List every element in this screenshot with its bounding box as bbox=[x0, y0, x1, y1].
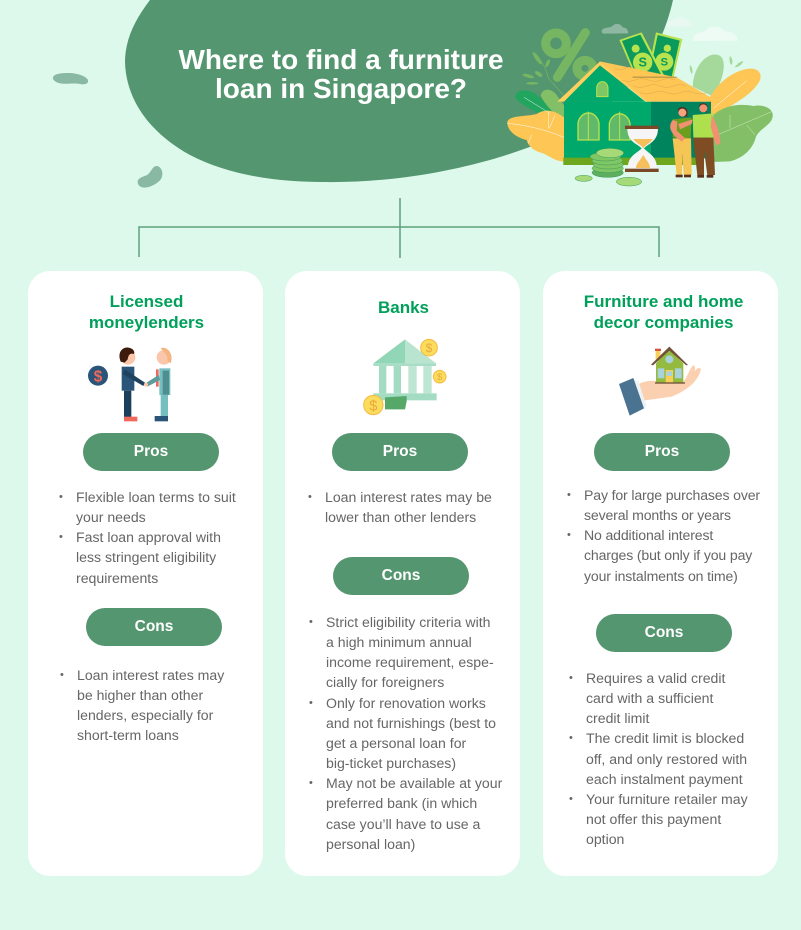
panel: furniture and home decor companies bbox=[543, 271, 778, 876]
card 3 pros list: several months or years bbox=[584, 507, 731, 523]
title bbox=[178, 44, 504, 104]
card 3 cons list: Your furniture retailer may bbox=[586, 791, 748, 807]
header blob bbox=[125, 0, 673, 182]
twig leaves bbox=[522, 51, 563, 95]
decorative blob left bbox=[53, 73, 88, 84]
card 3 cons button bbox=[596, 614, 732, 652]
card 3 cons list: each instalment payment bbox=[586, 771, 743, 787]
card 3 pros list: No additional interest bbox=[584, 527, 713, 543]
text: • bbox=[60, 669, 64, 681]
text: • bbox=[308, 491, 312, 503]
card 2 cons list: big-ticket purchases) bbox=[326, 755, 456, 771]
house bbox=[557, 61, 711, 165]
card 2 cons button: Cons bbox=[382, 567, 420, 584]
background leaves bbox=[507, 55, 773, 162]
card 2 pros list: Loan interest rates may be bbox=[325, 489, 492, 505]
couple bbox=[670, 103, 720, 178]
card 1 cons list: short-term loans bbox=[77, 727, 179, 743]
card 1 pros button: Pros bbox=[134, 443, 168, 460]
card 2 pros button: Pros bbox=[383, 443, 417, 460]
decorative blob lower bbox=[138, 166, 162, 188]
heading: licensed moneylenders: moneylenders bbox=[89, 313, 204, 332]
card 1 cons list: Loan interest rates may bbox=[77, 667, 224, 683]
card 1 cons button bbox=[86, 608, 222, 646]
percent sign bbox=[546, 33, 593, 77]
card 2 cons list: May not be available at your bbox=[326, 775, 502, 791]
icon: bank with coins bbox=[363, 338, 446, 416]
card 3 pros list: your instalments on time) bbox=[584, 568, 738, 584]
icon: bank with coins: $ bbox=[369, 398, 377, 414]
card 1 pros list: Flexible loan terms to suit bbox=[76, 489, 236, 505]
text: • bbox=[567, 489, 571, 501]
card 3 pros list: charges (but only if you pay bbox=[584, 547, 752, 563]
banknotes: S bbox=[661, 57, 669, 69]
icon: bank with coins: $ bbox=[437, 372, 443, 382]
card 1 pros list: less stringent eligibility bbox=[76, 549, 216, 565]
title: Where to find a furniture bbox=[178, 44, 504, 75]
card 3 pros button bbox=[594, 433, 730, 470]
illustration: house, money and couple bbox=[507, 18, 773, 186]
text: • bbox=[309, 697, 313, 709]
card 2 cons list: personal loan) bbox=[326, 836, 415, 852]
card 2 pros list: lower than other lenders bbox=[325, 509, 476, 525]
banknotes: S bbox=[638, 56, 647, 70]
card 1 cons button: Cons bbox=[135, 618, 173, 635]
text: • bbox=[569, 672, 573, 684]
card 2 cons list: get a personal loan for bbox=[326, 735, 466, 751]
coin stack bbox=[575, 148, 642, 186]
card 2 cons list: and not furnishings (best to bbox=[326, 715, 496, 731]
card 2 cons list: Strict eligibility criteria with bbox=[326, 614, 490, 630]
icon: handshake bbox=[88, 348, 172, 422]
card 2 cons list: income requirement, espe- bbox=[326, 654, 494, 670]
card 2 cons list bbox=[309, 614, 502, 852]
card 2 cons list: case you’ll have to use a bbox=[326, 816, 480, 832]
card 2 cons button bbox=[333, 557, 469, 594]
text: • bbox=[59, 531, 63, 543]
icon: handshake: $ bbox=[94, 368, 103, 385]
card 1 pros list: Fast loan approval with bbox=[76, 529, 221, 545]
clouds bbox=[602, 17, 738, 41]
card 2 pros list bbox=[308, 489, 492, 525]
icon: bank with coins: $ bbox=[426, 341, 433, 355]
text: • bbox=[309, 777, 313, 789]
heading: furniture and home decor companies: Furniture and home bbox=[584, 292, 743, 311]
icon: hand holding a house bbox=[619, 346, 701, 416]
card 2 cons list: preferred bank (in which bbox=[326, 795, 477, 811]
text: • bbox=[569, 793, 573, 805]
hourglass bbox=[625, 126, 659, 172]
text: • bbox=[569, 732, 573, 744]
heading: banks: Banks bbox=[378, 298, 429, 317]
heading: furniture and home decor companies bbox=[584, 292, 743, 332]
heading: furniture and home decor companies: decor companies bbox=[594, 313, 733, 332]
card 1 pros list bbox=[59, 489, 236, 586]
title: loan in Singapore? bbox=[215, 72, 467, 104]
card 3 pros list: Pay for large purchases over bbox=[584, 487, 760, 503]
card 2 cons list: cially for foreigners bbox=[326, 674, 444, 690]
card 1 cons list bbox=[60, 667, 224, 743]
card 1 pros list: requirements bbox=[76, 570, 158, 586]
card 3 cons list: not offer this payment bbox=[586, 811, 721, 827]
card 1 cons list: lenders, especially for bbox=[77, 707, 213, 723]
panel: licensed moneylenders bbox=[28, 271, 263, 876]
card 1 pros button bbox=[83, 433, 219, 470]
heading: licensed moneylenders bbox=[89, 292, 204, 332]
text: • bbox=[309, 616, 313, 628]
text: • bbox=[59, 491, 63, 503]
text: • bbox=[567, 529, 571, 541]
card 3 cons list bbox=[569, 670, 748, 847]
card 3 pros button: Pros bbox=[645, 443, 679, 460]
card 2 pros button bbox=[332, 433, 468, 470]
card 3 cons list: option bbox=[586, 831, 624, 847]
card 3 pros list bbox=[567, 487, 760, 584]
card 2 cons list: Only for renovation works bbox=[326, 695, 486, 711]
card 1 cons list: be higher than other bbox=[77, 687, 203, 703]
card 3 cons list: Requires a valid credit bbox=[586, 670, 725, 686]
card 3 cons list: off, and only restored with bbox=[586, 751, 747, 767]
connector lines bbox=[139, 198, 659, 258]
card 1 pros list: your needs bbox=[76, 509, 146, 525]
card 3 cons list: The credit limit is blocked bbox=[586, 730, 744, 746]
card 3 cons list: credit limit bbox=[586, 710, 649, 726]
card 3 cons list: card with a sufficient bbox=[586, 690, 713, 706]
banknotes bbox=[619, 32, 682, 80]
heading: licensed moneylenders: Licensed bbox=[110, 292, 183, 311]
card 3 cons button: Cons bbox=[645, 624, 683, 641]
card 2 cons list: a high minimum annual bbox=[326, 634, 472, 650]
panel: banks bbox=[285, 271, 520, 876]
